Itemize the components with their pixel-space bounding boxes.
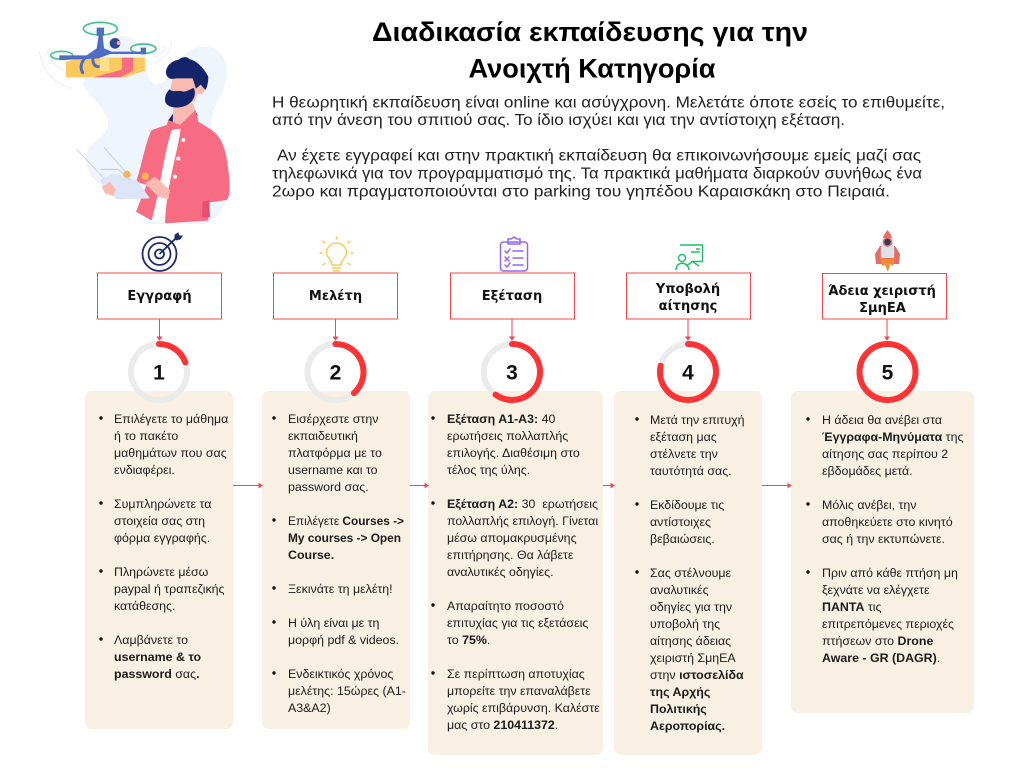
panel: step 3 card: Απαραίτητο ποσοστό	[447, 599, 564, 613]
panel: step 1 card: κατάθεσης.	[114, 599, 175, 613]
drone	[39, 22, 172, 88]
panel: step 2 card: Α3&Α2)	[288, 701, 331, 715]
panel: step 3 card: επιλογής. Διαθέσιμη στο	[447, 446, 580, 460]
man	[77, 57, 230, 223]
intro text: 2ωρο και πραγματοποιούνται στο parking του γηπέδου Καραισκάκη στο Πειραιά.	[272, 184, 890, 200]
panel: step 4 card: Πολιτικής	[650, 702, 707, 716]
panel: step 1 card: φόρμα εγγραφής.	[114, 531, 210, 545]
panel: step 5 card	[791, 391, 974, 713]
panel: step 1 card: ή το πακέτο	[114, 429, 178, 443]
panel: step 2 card: Ξεκινάτε τη μελέτη!	[288, 582, 393, 596]
panel: step 3 card: χωρίς επιβάρυνση. Καλέστε	[447, 701, 600, 715]
step header: Μελέτη	[274, 273, 398, 319]
panel: step 3 card: ερωτήσεις πολλαπλής	[447, 429, 568, 443]
arrow: card 1 to card 2	[233, 484, 262, 488]
step header: Υποβολή αίτησης	[626, 273, 750, 319]
panel: step 5 card: Πριν από κάθε πτήση μη	[822, 566, 958, 580]
step header: Άδεια χειριστή ΣμηΕΑ: Άδεια χειριστή	[828, 284, 936, 299]
title: Ανοιχτή Κατηγορία	[468, 54, 716, 84]
panel: step 1 card: μαθημάτων που σας	[114, 446, 227, 460]
panel: step 4 card: χειριστή ΣμηΕΑ	[650, 651, 736, 665]
panel: step 1 card: Συμπληρώνετε τα	[114, 497, 211, 511]
panel: step 3 card: Εξέταση Α2: 30 ερωτήσεις	[447, 497, 598, 511]
progress ring 4: 4	[682, 362, 694, 384]
arrow: card 3 to card 4	[603, 484, 614, 488]
panel: step 4 card: της Αρχής	[650, 685, 710, 699]
panel: step 4 card: ταυτότητά σας.	[650, 464, 732, 478]
panel: step 4 card: υποβολή της	[650, 617, 720, 631]
panel: step 2 card: πλατφόρμα με το	[288, 446, 382, 460]
panel: step 3 card	[428, 391, 603, 755]
icon: target	[142, 233, 182, 271]
panel: step 5 card: πτήσεων στο Drone	[822, 634, 933, 648]
panel: step 2 card: password σας.	[288, 480, 369, 494]
panel: step 3 card: τέλος της ύλης.	[447, 463, 530, 477]
panel: step 1 card	[85, 391, 233, 729]
progress ring 5: 5	[882, 362, 894, 384]
panel: step 2 card: Η ύλη είναι με τη	[288, 616, 380, 630]
panel: step 3 card: πολλαπλής επιλογή. Γίνεται	[447, 514, 598, 528]
panel: step 2 card: εκπαιδευτική	[288, 429, 358, 443]
panel: step 2 card	[262, 391, 410, 729]
panel: step 1 card: Πληρώνετε μέσω	[114, 565, 209, 579]
panel: step 4 card: Μετά την επιτυχή	[650, 413, 745, 427]
arrow: header 5 to circle 5	[885, 319, 889, 340]
panel: step 4 card	[614, 391, 762, 755]
panel: step 3 card: μας στο 210411372.	[447, 718, 558, 732]
panel: step 3 card: επιτήρησης. Θα λάβετε	[447, 548, 574, 562]
panel: step 3 card: μέσω απομακρυσμένης	[447, 531, 577, 545]
panel: step 3 card: αναλυτικές οδηγίες.	[447, 565, 554, 579]
progress ring 2	[308, 344, 364, 400]
panel: step 2 card: Εισέρχεστε στην	[288, 412, 378, 426]
step header: Υποβολή αίτησης: αίτησης	[659, 299, 717, 314]
progress ring 4	[660, 344, 716, 400]
panel: step 5 card: σας ή την εκτυπώνετε.	[822, 532, 945, 546]
panel: step 4 card: Εκδίδουμε τις	[650, 498, 724, 512]
panel: step 3 card: επιτυχίας για τις εξετάσεις	[447, 616, 588, 630]
panel: step 1 card: Λαμβάνετε το	[114, 633, 188, 647]
step header: Εξέταση	[450, 273, 574, 319]
step header: Εγγραφή: Εγγραφή	[127, 289, 192, 304]
progress ring 1	[131, 344, 187, 400]
arrow: header 2 to circle 2	[334, 319, 338, 340]
panel: step 2 card: Course.	[288, 548, 334, 562]
progress ring 5	[860, 344, 916, 400]
panel: step 3 card: το 75%.	[447, 633, 490, 647]
panel: step 5 card: ΠΑΝΤΑ τις	[822, 600, 882, 614]
panel: step 4 card: αναλυτικές	[650, 583, 709, 597]
panel: step 5 card: επιτρεπόμενες περιοχές	[822, 617, 954, 631]
step header: Εγγραφή	[98, 273, 222, 319]
panel: step 1 card: Επιλέγετε το μάθημα	[114, 412, 228, 426]
panel: step 5 card: εβδομάδες μετά.	[822, 464, 913, 478]
panel: step 5 card: Έγγραφα-Μηνύματα της	[822, 430, 963, 444]
controller	[77, 147, 128, 178]
panel: step 1 card: paypal ή τραπεζικής	[114, 582, 225, 596]
panel: step 2 card: μορφή pdf & videos.	[288, 633, 399, 647]
panel: step 5 card: Aware - GR (DAGR).	[822, 651, 940, 665]
progress ring 3	[484, 344, 540, 400]
panel: step 4 card: αίτησης άδειας	[650, 634, 731, 648]
panel: step 4 card: αντίστοιχες	[650, 515, 711, 529]
illustration: man flying a drone	[39, 22, 230, 224]
icon: clipboard checklist	[500, 237, 528, 271]
panel: step 4 card: στέλνετε την	[650, 447, 718, 461]
panel: step 4 card: στην ιστοσελίδα	[650, 668, 744, 682]
step header: Άδεια χειριστή ΣμηΕΑ	[822, 274, 946, 319]
panel: step 5 card: αποθηκεύετε στο κινητό	[822, 515, 953, 529]
step header: Άδεια χειριστή ΣμηΕΑ: ΣμηΕΑ	[859, 301, 906, 316]
panel: step 2 card: My courses -> Open	[288, 531, 401, 545]
step header: Υποβολή αίτησης: Υποβολή	[655, 282, 720, 297]
panel: step 4 card: Σας στέλνουμε	[650, 566, 731, 580]
intro text	[272, 94, 945, 200]
icon: rocket	[875, 230, 900, 272]
arrow: header 1 to circle 1	[158, 319, 162, 340]
panel: step 3 card: Σε περίπτωση αποτυχίας	[447, 667, 585, 681]
title: Διαδικασία εκπαίδευσης για την	[372, 17, 808, 47]
panel: step 3 card: Εξέταση Α1-Α3: 40	[447, 412, 555, 426]
intro text: τηλεφωνικά για τον προγραμματισμό της. Τα πρακτικά μαθήματα διαρκούν συνήθως ένα	[272, 166, 922, 182]
progress ring 1: 1	[153, 362, 165, 384]
panel: step 5 card: Μόλις ανέβει, την	[822, 498, 916, 512]
panel: step 5 card: ξεχνάτε να ελέγχετε	[822, 583, 930, 597]
panel: step 2 card: Επιλέγετε Courses ->	[288, 514, 404, 528]
panel: step 4 card: βεβαιώσεις.	[650, 532, 715, 546]
panel: step 1 card: ενδιαφέρει.	[114, 463, 175, 477]
arrow: header 4 to circle 4	[686, 319, 690, 340]
progress ring 3: 3	[506, 362, 518, 384]
icon: light bulb	[320, 237, 353, 271]
panel: step 2 card: Ενδεικτικός χρόνος	[288, 667, 393, 681]
intro text: από την άνεση του σπιτιού σας. Το ίδιο ισχύει και για την αντίστοιχη εξέταση.	[272, 112, 845, 129]
panel: step 5 card: Η άδεια θα ανέβει στα	[822, 413, 942, 427]
intro text: Η θεωρητική εκπαίδευση είναι online και ασύγχρονη. Μελετάτε όποτε εσείς το επιθυμείτε,	[272, 94, 945, 112]
intro text: Αν έχετε εγγραφεί και στην πρακτική εκπαίδευση θα επικοινωνήσουμε εμείς μαζί σας	[277, 148, 921, 164]
arrow: card 4 to card 5	[762, 484, 791, 488]
panel: step 5 card: αίτησης σας περίπου 2	[822, 447, 948, 461]
step header: Εξέταση: Εξέταση	[482, 289, 542, 304]
arrow: card 2 to card 3	[410, 484, 428, 488]
panel: step 4 card: Αεροπορίας.	[650, 719, 725, 733]
progress ring 2: 2	[330, 362, 341, 384]
panel: step 1 card: username & το	[114, 650, 202, 664]
panel: step 4 card: οδηγίες για την	[650, 600, 732, 614]
icon: presentation	[676, 245, 702, 270]
panel: step 1 card: password σας.	[114, 667, 200, 681]
panel: step 2 card: username και το	[288, 463, 378, 477]
panel: step 4 card: εξέταση μας	[650, 430, 717, 444]
step header: Μελέτη: Μελέτη	[309, 289, 362, 304]
arrow: header 3 to circle 3	[510, 319, 514, 340]
title	[372, 17, 808, 84]
panel: step 3 card: μπορείτε την επαναλάβετε	[447, 684, 591, 698]
panel: step 2 card: μελέτης: 15ώρες (Α1-	[288, 684, 406, 698]
panel: step 1 card: στοιχεία σας στη	[114, 514, 205, 528]
